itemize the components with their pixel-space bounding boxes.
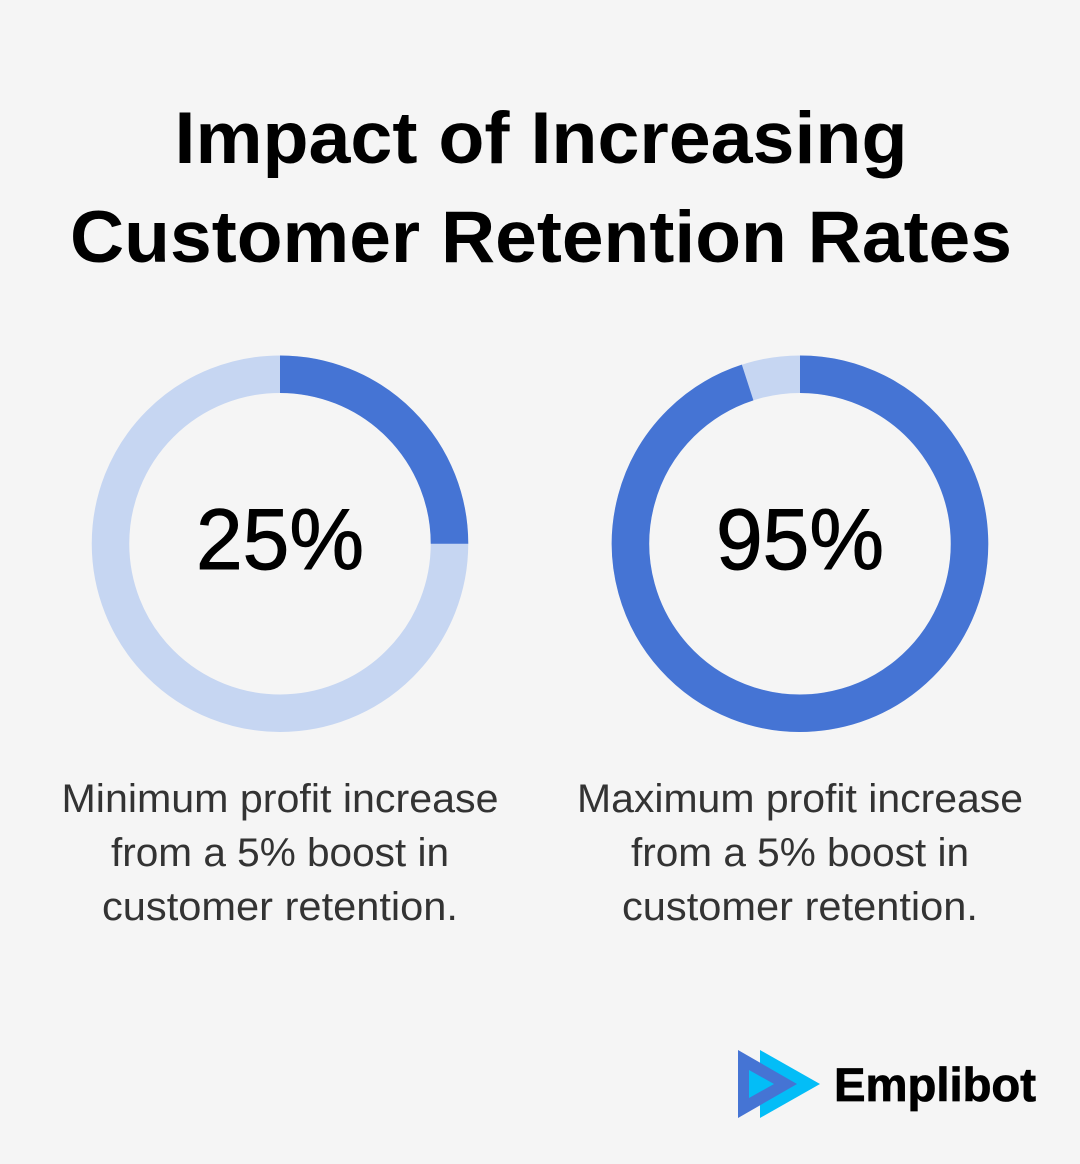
caption: minimum: customer retention. [102, 885, 458, 929]
title: Customer Retention Rates [70, 197, 1012, 278]
caption: maximum: customer retention. [622, 885, 978, 929]
caption: minimum: Minimum profit increase [62, 777, 498, 821]
panel: maximum profit increase [577, 374, 1023, 929]
value: 25%: 25% [196, 492, 364, 588]
donut chart: 95% [630, 374, 970, 713]
wordmark: Emplibot [834, 1058, 1036, 1111]
panel: minimum profit increase [62, 374, 498, 929]
title: Impact of Increasing [174, 98, 908, 179]
caption: minimum [62, 777, 498, 929]
title [70, 98, 1012, 278]
caption: maximum: Maximum profit increase [577, 777, 1023, 821]
icon: play triangles [738, 1050, 820, 1118]
caption: maximum: from a 5% boost in [631, 831, 969, 875]
caption: minimum: from a 5% boost in [111, 831, 449, 875]
donut chart: 25% [110, 374, 450, 713]
caption: maximum [577, 777, 1023, 929]
value: 95%: 95% [716, 492, 884, 588]
logo: Emplibot [738, 1050, 1036, 1118]
